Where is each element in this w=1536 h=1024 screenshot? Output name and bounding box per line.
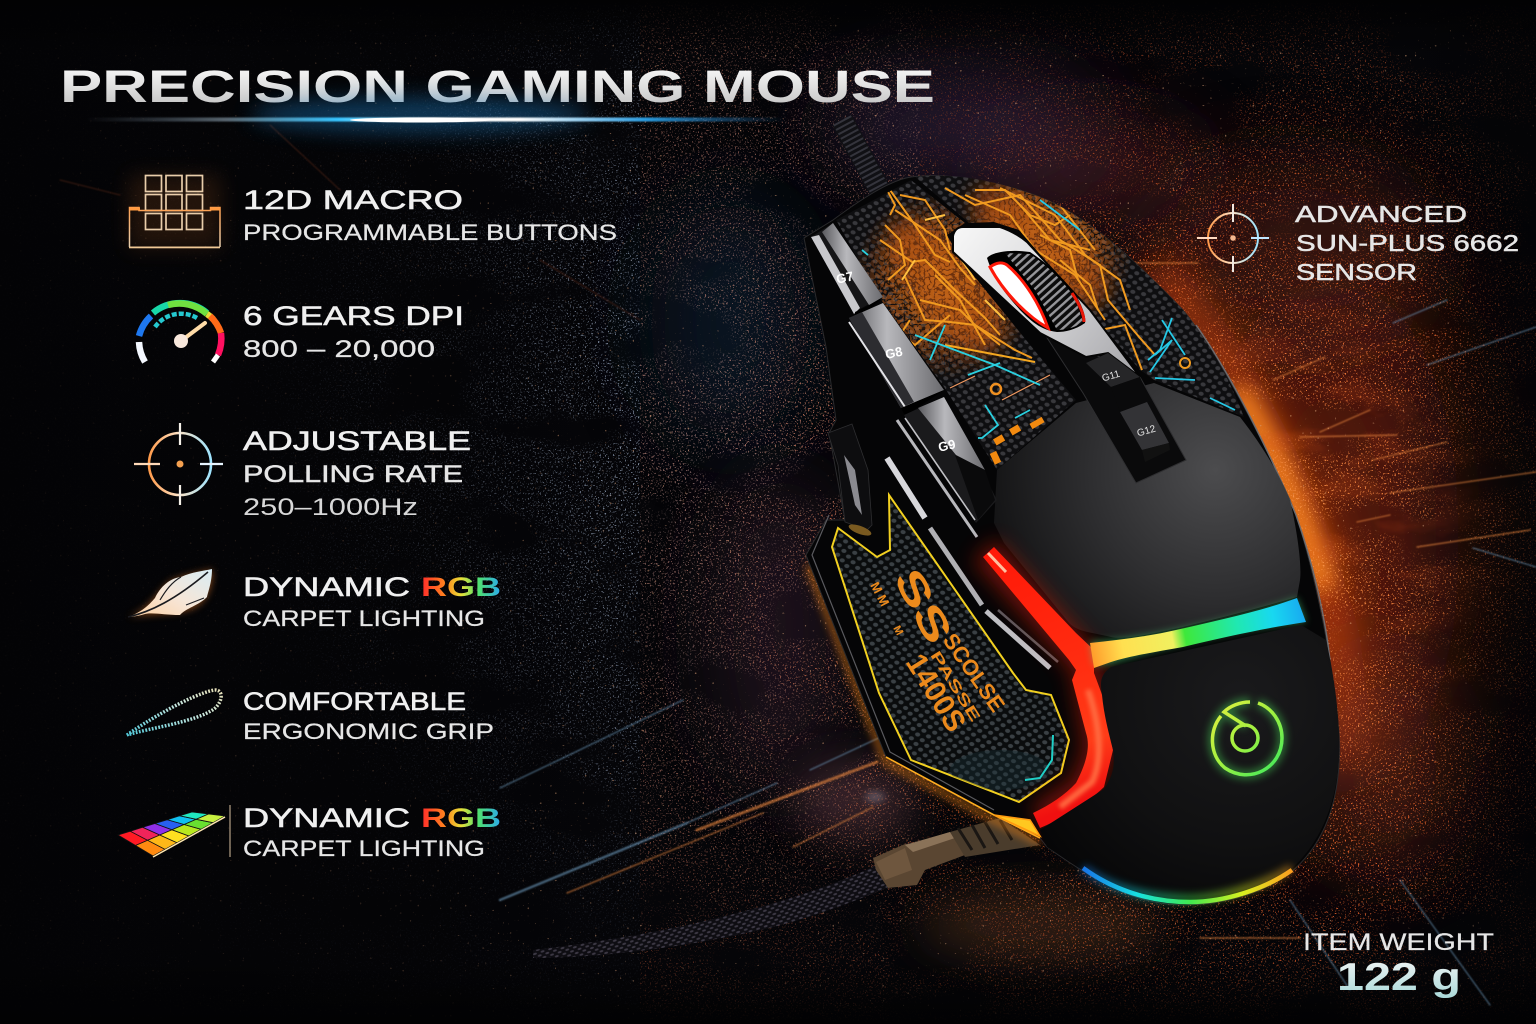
title: PRECISION GAMING MOUSE — [60, 61, 935, 112]
sensor text: SUN-PLUS 6662 — [1296, 230, 1519, 256]
thumb panel etched text: 1400S — [899, 648, 972, 738]
RGB light bar — [1090, 598, 1306, 668]
heading: dynamic RGB — [243, 803, 501, 833]
heading: comfortable: COMFORTABLE — [243, 688, 466, 716]
thumb panel etched text: M — [890, 624, 905, 638]
weight value: 122 g — [1337, 956, 1461, 999]
macro keys: G11 G12 — [1086, 353, 1170, 462]
mouse body shell — [804, 176, 1339, 905]
divider line — [229, 805, 231, 857]
button G7 — [811, 223, 883, 322]
sensor callout — [1197, 201, 1519, 285]
cable: top braided — [842, 120, 885, 200]
thumb panel etched text — [870, 571, 1006, 731]
subheading: polling range: 250–1000Hz — [243, 494, 418, 521]
weight label: ITEM WEIGHT — [1303, 929, 1494, 956]
upper matte shell — [994, 383, 1300, 638]
item weight — [1303, 929, 1494, 999]
carbon panel: right with circuit — [915, 167, 1244, 417]
wheel opening — [987, 251, 1085, 332]
button G8 — [849, 303, 944, 416]
icon: rainbow keypad — [118, 812, 225, 857]
sensor text — [1295, 201, 1519, 285]
glowing logo — [1212, 702, 1282, 775]
lower left rim glow — [808, 565, 1040, 842]
label G11: G11 — [1101, 369, 1122, 384]
label G7: G7 — [835, 268, 855, 287]
label G9: G9 — [937, 436, 957, 455]
heading: 6 gears DPI: 6 GEARS DPI — [243, 301, 464, 331]
thumb panel etched text: PASSE — [927, 648, 983, 725]
thumb panel etched text: SS — [885, 562, 961, 651]
lower left rim light — [886, 757, 1040, 838]
heading: 12D macro: 12D MACRO — [243, 185, 463, 215]
heading: dynamic RGB: DYNAMIC — [243, 803, 410, 833]
icon: macro button grid — [129, 175, 221, 249]
subheading: ergonomic grip: ERGONOMIC GRIP — [243, 719, 494, 744]
sensor text: SENSOR — [1296, 259, 1417, 285]
carbon panel: left with circuit — [836, 180, 1076, 470]
subheading: carpet lighting: CARPET LIGHTING — [243, 836, 485, 861]
label G8: G8 — [884, 344, 904, 362]
feature: RGB carpet lighting 1 — [128, 569, 501, 631]
lower palm rest — [1040, 625, 1339, 897]
icon: feather — [128, 569, 212, 617]
heading: adjustable polling rate — [243, 426, 471, 488]
cable: lower with connector — [533, 818, 1040, 958]
feature: RGB carpet lighting 2 — [118, 803, 501, 861]
red light strip — [983, 547, 1113, 828]
feature: ergonomic grip — [127, 688, 494, 744]
icon: crosshair — [134, 423, 223, 505]
title underline beam — [85, 97, 785, 133]
RGB bottom arc — [1083, 868, 1292, 902]
side gloss edge — [812, 515, 994, 810]
icon: sensor crosshair — [1197, 204, 1269, 272]
subheading: carpet lighting: CARPET LIGHTING — [243, 606, 485, 631]
thumb panel etched text: M M — [867, 579, 892, 609]
mouse — [804, 167, 1339, 905]
icon: rainbow gauge — [139, 303, 221, 362]
yellow lower edge light — [994, 815, 1040, 836]
subheading: programmable buttons: PROGRAMMABLE BUTTONS — [243, 220, 617, 245]
heading: dynamic RGB: RGB — [421, 803, 501, 833]
feature: polling rate — [134, 423, 471, 521]
thumb fin — [828, 424, 873, 538]
feature: 12D macro — [129, 175, 617, 249]
silver plate — [953, 227, 1140, 377]
button G9 — [904, 397, 997, 523]
subheading: DPI range: 800 – 20,000 — [243, 336, 435, 363]
sensor text: ADVANCED — [1295, 201, 1467, 227]
heading: adjustable polling rate: POLLING RATE — [243, 461, 463, 488]
thumb panel etched text: SCOLSE — [938, 629, 1010, 717]
feature: DPI — [139, 301, 464, 363]
scroll wheel housing — [953, 227, 1186, 483]
icon: dotted grip loop — [127, 690, 221, 735]
heading: dynamic RGB: RGB — [421, 572, 501, 602]
thumb panel with grip text — [832, 495, 1069, 802]
side buttons: G7 G8 G9 — [811, 223, 997, 523]
heading: adjustable polling rate: ADJUSTABLE — [243, 426, 471, 456]
thumb strip buttons — [887, 420, 1058, 668]
right rim highlight — [1196, 325, 1330, 660]
label G12: G12 — [1136, 424, 1157, 439]
heading: dynamic RGB: DYNAMIC — [243, 572, 410, 602]
heading: dynamic RGB — [243, 572, 501, 602]
